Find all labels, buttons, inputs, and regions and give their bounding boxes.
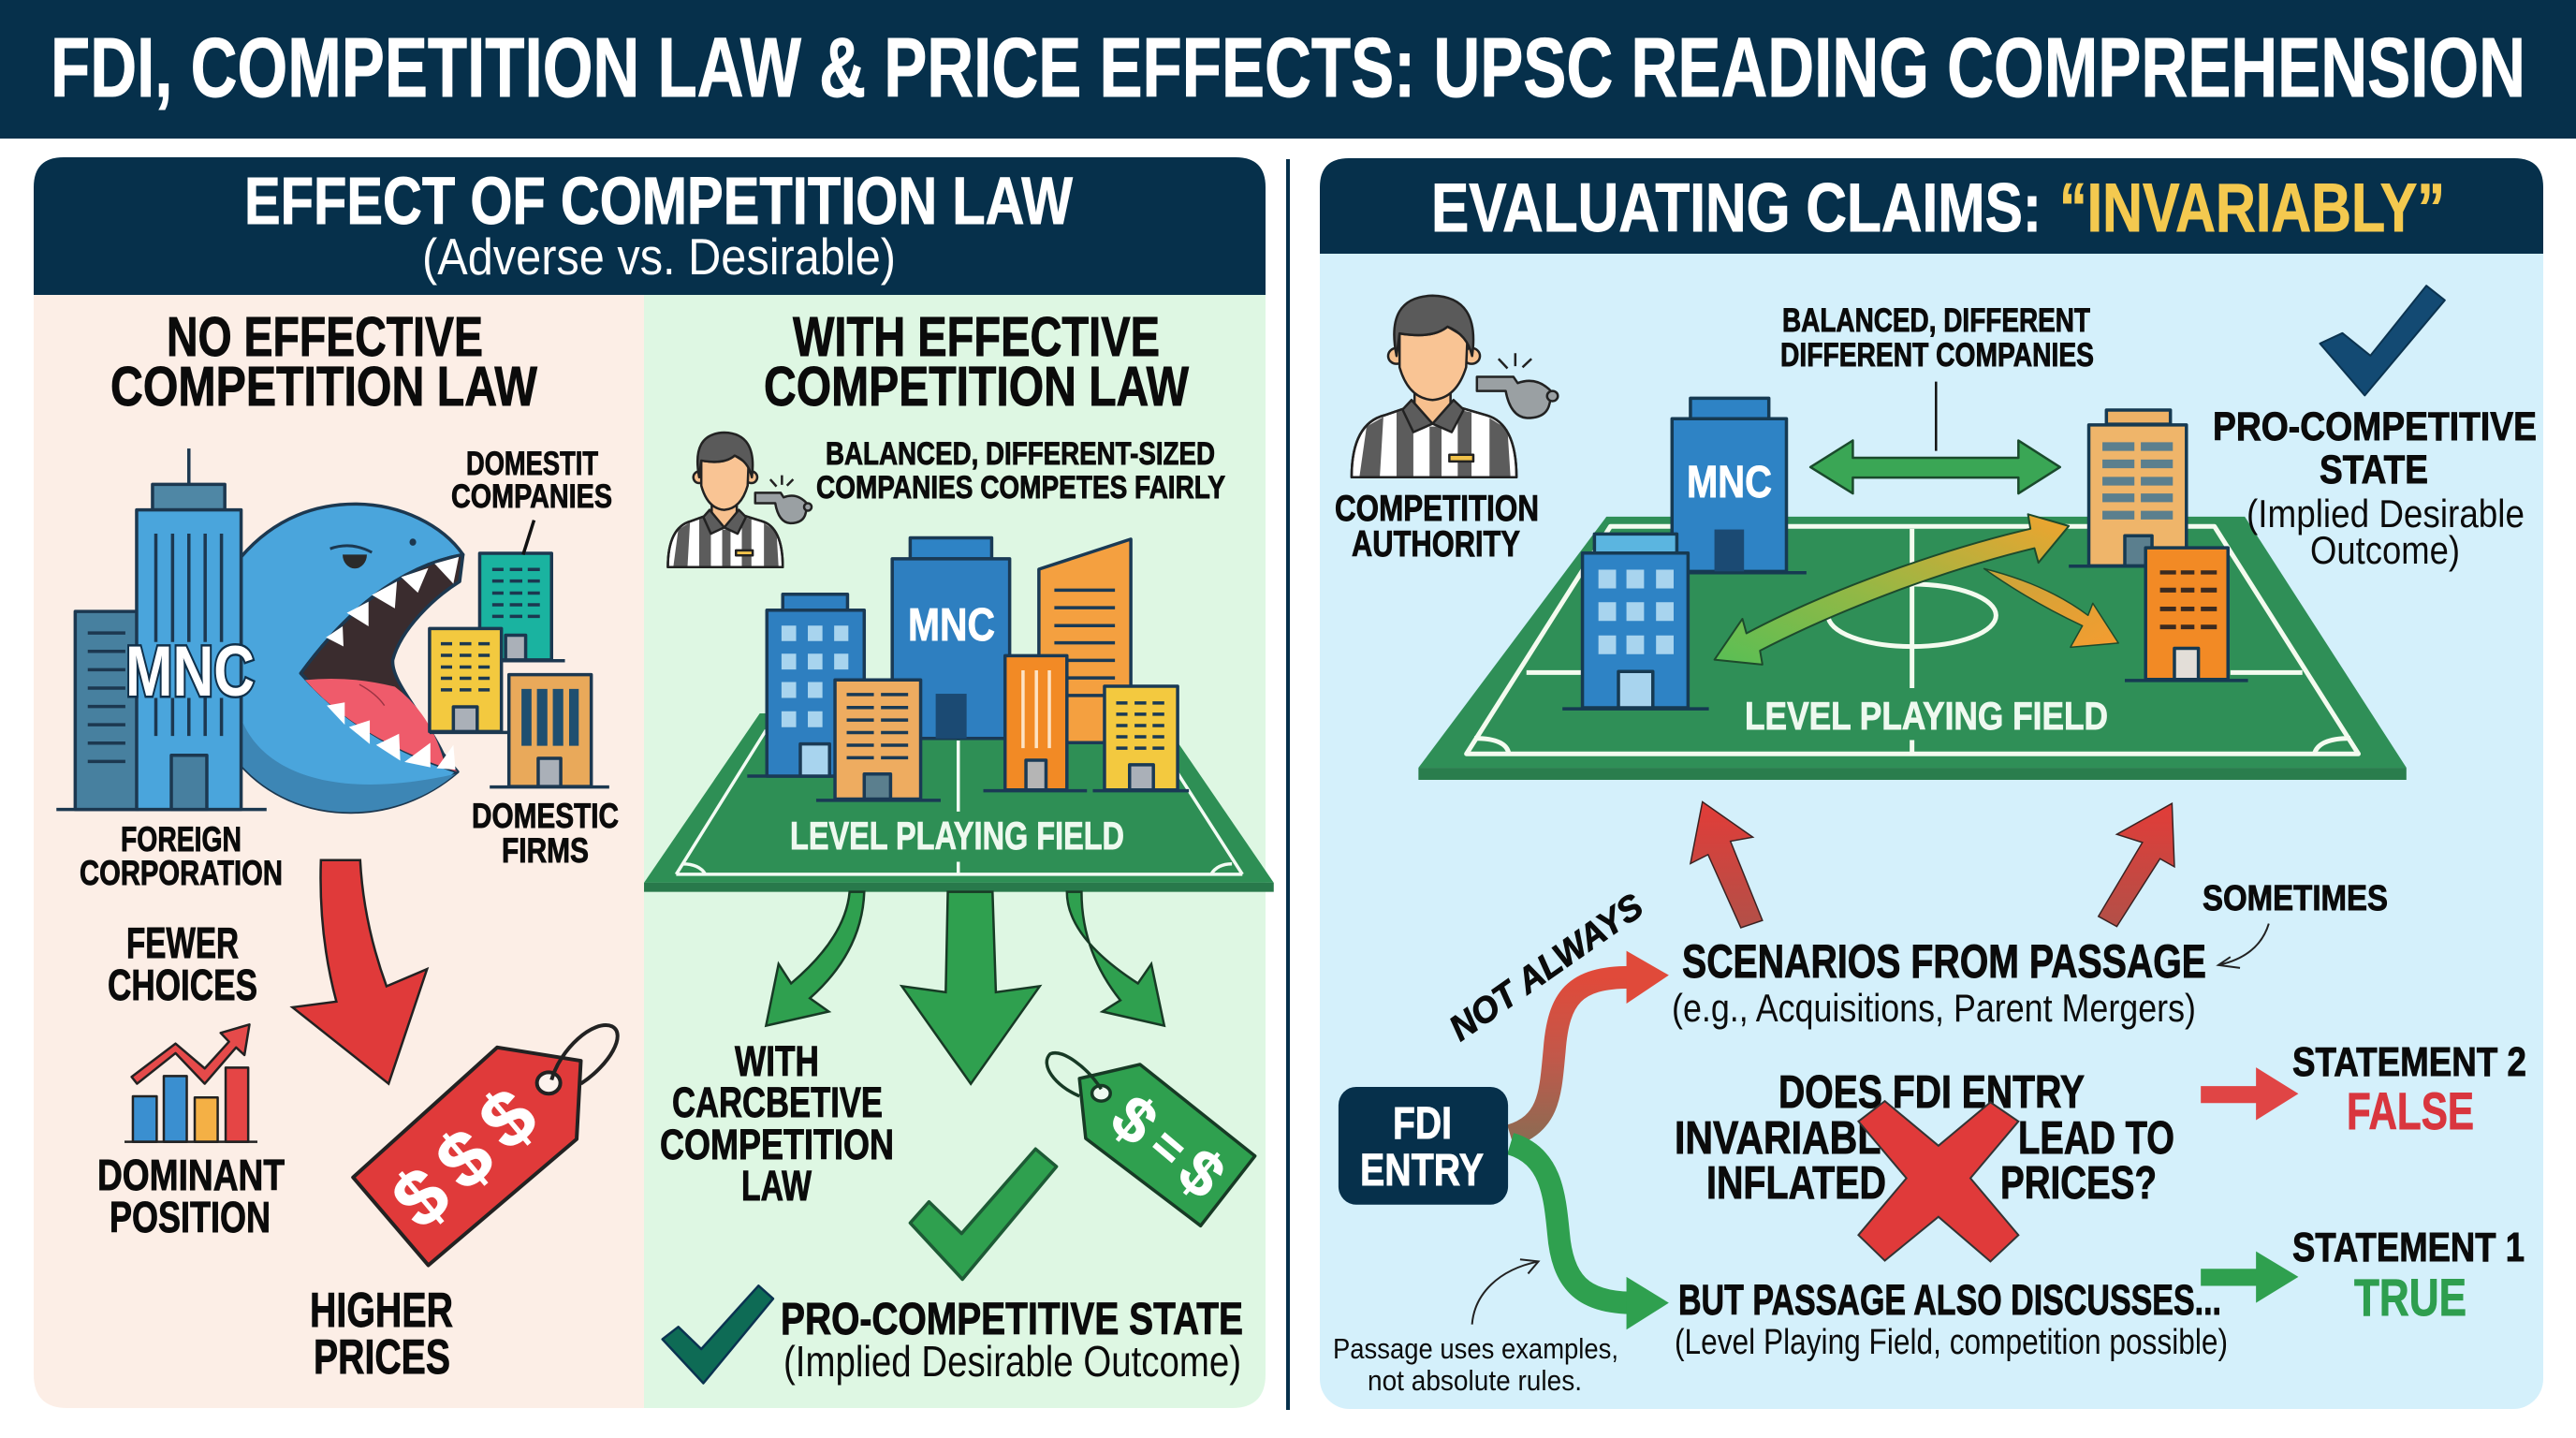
- verdict: statement 1 true: TRUE: [2354, 1268, 2466, 1327]
- illustration: level playing field with buildings: [644, 538, 1274, 892]
- text: pro-competitive state: STATE: [2320, 448, 2428, 492]
- text: pro-competitive state: (Implied Desirable Outcome): [783, 1337, 1241, 1386]
- icon: teal domestic building: [479, 553, 565, 661]
- label: domestic firms: [472, 797, 619, 870]
- icon: monster: [242, 504, 463, 812]
- label: dominant position: DOMINANT: [97, 1151, 285, 1199]
- box: FDI entry: [1339, 1087, 1508, 1205]
- label: with carcbetive competition law: [660, 1037, 894, 1210]
- panel header: effect of competition law: EFFECT OF COMPETITION LAW: [244, 165, 1073, 239]
- label: foreign corporation: [80, 820, 283, 892]
- arrow: red up arrow left: [1690, 801, 1763, 928]
- arrow: red up arrow right: [2099, 803, 2174, 927]
- label: balanced different companies: BALANCED, DIFFERENT: [1782, 302, 2090, 339]
- icon: tan building: [816, 680, 941, 800]
- arrow: examples pointer: [1472, 1259, 1539, 1325]
- label: level playing field: LEVEL PLAYING FIELD: [790, 814, 1124, 858]
- label: domestit companies: [451, 446, 612, 515]
- text: passage uses examples note: Passage uses examples,: [1333, 1332, 1618, 1365]
- icon: MNC tower: [56, 448, 267, 810]
- icon: blue building: [747, 594, 864, 776]
- icon: dark green check: [663, 1285, 773, 1384]
- icon: pitch: [1418, 517, 2407, 780]
- label: competition authority: [1335, 489, 1539, 565]
- text: pro-competitive state: PRO-COMPETITIVE: [2213, 404, 2537, 449]
- text: does FDI entry invariably lead to inflated prices: PRICES?: [2000, 1158, 2157, 1209]
- arrow: gradient diagonal double arrow: [1715, 514, 2069, 665]
- vertical divider: [1286, 159, 1290, 1410]
- panel header: effect of competition law: [34, 157, 1266, 295]
- text: does FDI entry invariably lead to inflated prices: [1675, 1067, 2174, 1209]
- arrow: sometimes pointer: [2218, 924, 2269, 968]
- text: but passage also discusses: [1675, 1276, 2228, 1362]
- label: fewer choices: [108, 918, 257, 1009]
- panel header: evaluating claims invariably: [1320, 158, 2543, 254]
- label: with carcbetive competition law: CARCBETIVE: [672, 1078, 883, 1126]
- verdict: statement 2 false: STATEMENT 2: [2292, 1039, 2526, 1085]
- label: balanced different companies: DIFFERENT COMPANIES: [1780, 337, 2094, 374]
- heading: no effective competition law: NO EFFECTIVE: [167, 306, 483, 368]
- icon: yellow building: [1092, 686, 1189, 791]
- heading: with effective competition law: [764, 306, 1189, 418]
- icon: red price tag: $: [419, 1111, 509, 1207]
- text: balanced companies compete fairly: COMPANIES COMPETES FAIRLY: [816, 470, 1225, 506]
- panel header: evaluating claims invariably: “INVARIABLY”: [2059, 170, 2445, 246]
- text: pro-competitive state: PRO-COMPETITIVE STATE: [781, 1295, 1243, 1344]
- label: dominant position: [97, 1151, 285, 1241]
- flow: FDI entry paths: [1339, 801, 2298, 1329]
- label: FDI entry: [1360, 1099, 1484, 1196]
- text: passage uses examples note: not absolute rules.: [1368, 1364, 1582, 1397]
- arrows: three green arrows down: [766, 892, 1164, 1084]
- label: MNC: MNC: [908, 600, 995, 651]
- label: higher prices: PRICES: [314, 1330, 450, 1385]
- text: balanced companies compete fairly: [816, 436, 1225, 506]
- icon: front blue building: [1562, 534, 1709, 709]
- label: FDI entry: FDI: [1393, 1099, 1452, 1149]
- text: does FDI entry invariably lead to inflated prices: INFLATED: [1706, 1158, 1886, 1209]
- verdict: statement 2 false: FALSE: [2347, 1081, 2474, 1140]
- icon: orange building: [2125, 548, 2248, 681]
- icon: tan building: [2069, 410, 2190, 566]
- text: does FDI entry invariably lead to inflated prices: DOES FDI ENTRY: [1778, 1067, 2085, 1118]
- panel: effect of competition law: [34, 157, 1274, 1408]
- icon: red price tag: $: [375, 1150, 465, 1245]
- arrow: green branch to passage: [1511, 1144, 1669, 1329]
- icon: tall orange building: [1039, 539, 1131, 742]
- arrow: green to true: [2201, 1252, 2298, 1303]
- icon: yellow domestic building: [430, 628, 507, 732]
- heading: with effective competition law: COMPETITION LAW: [764, 356, 1189, 418]
- heading: no effective competition law: [110, 306, 537, 418]
- text: scenarios from passage: (e.g., Acquisitions, Parent Mergers): [1672, 986, 2196, 1030]
- text: scenarios from passage: [1672, 935, 2206, 1030]
- icon: tan domestic building: [490, 675, 609, 787]
- icon: green price tag: [1046, 1053, 1255, 1225]
- heading: with effective competition law: WITH EFFECTIVE: [793, 306, 1160, 368]
- label: with carcbetive competition law: LAW: [741, 1162, 812, 1210]
- illustration: MNC monster eating domestic firms: [56, 448, 609, 812]
- label: fewer choices: FEWER: [126, 918, 239, 967]
- icon: MNC building: [1671, 398, 1807, 573]
- label: competition authority: AUTHORITY: [1352, 524, 1520, 565]
- chart icon: dominant position bars: [124, 1024, 257, 1142]
- label: competition authority: COMPETITION: [1335, 489, 1539, 529]
- verdict: statement 2 false: [2292, 1039, 2526, 1140]
- label: dominant position: POSITION: [110, 1193, 271, 1241]
- icon: red X: [1858, 1101, 2018, 1261]
- text: pro-competitive state: Outcome): [2310, 528, 2460, 572]
- text: balanced companies compete fairly: BALANCED, DIFFERENT-SIZED: [826, 436, 1215, 472]
- label: foreign corporation: FOREIGN: [121, 820, 242, 858]
- illustration: level playing field with companies: [1418, 286, 2445, 780]
- title banner: [0, 0, 2576, 139]
- icon: green price tag: $: [1098, 1081, 1171, 1159]
- label: domestic firms: FIRMS: [502, 831, 589, 870]
- icon: green field: [644, 713, 1274, 892]
- text: does FDI entry invariably lead to inflated prices: INVARIABLY: [1675, 1113, 1903, 1164]
- text: pro-competitive state: [781, 1295, 1243, 1386]
- arrow: small orange arrow: [1984, 568, 2118, 647]
- label: balanced different companies: [1780, 302, 2094, 374]
- panel: evaluating claims: [1320, 158, 2543, 1409]
- text: scenarios from passage: SCENARIOS FROM PASSAGE: [1682, 935, 2206, 988]
- text: but passage also discusses: (Level Playing Field, competition possible): [1675, 1323, 2228, 1362]
- text: does FDI entry invariably lead to inflated prices: LEAD TO: [2018, 1113, 2174, 1164]
- label: higher prices: [310, 1284, 453, 1385]
- label: with carcbetive competition law: COMPETITION: [660, 1121, 894, 1168]
- text: pro-competitive state: [2213, 404, 2537, 572]
- text: pro-competitive state: (Implied Desirable: [2247, 492, 2525, 536]
- label: domestit companies: DOMESTIT: [466, 446, 598, 482]
- icon: red price tag: [353, 1025, 618, 1265]
- icon: green check: [910, 1149, 1057, 1280]
- label: domestit companies: COMPANIES: [451, 478, 612, 515]
- arrow: red to false: [2201, 1067, 2298, 1121]
- text: but passage also discusses: BUT PASSAGE ALSO DISCUSSES...: [1678, 1276, 2221, 1324]
- icon: orange building: [984, 655, 1087, 791]
- verdict: statement 1 true: [2292, 1225, 2525, 1327]
- label: domestic firms: DOMESTIC: [472, 797, 619, 835]
- label: MNC: MNC: [1687, 458, 1772, 507]
- arrow: green double arrow: [1810, 440, 2060, 493]
- label: MNC on tower: MNC: [125, 632, 255, 712]
- icon: MNC building: [892, 538, 1010, 739]
- label: not always: NOT ALWAYS: [1442, 887, 1650, 1049]
- icon: referee competition authority: [1352, 296, 1558, 477]
- label: foreign corporation: CORPORATION: [80, 854, 283, 892]
- panel header: evaluating claims invariably: EVALUATING CLAIMS:: [1431, 170, 2042, 246]
- label: higher prices: HIGHER: [310, 1284, 453, 1338]
- verdict: statement 1 true: STATEMENT 1: [2292, 1225, 2525, 1270]
- label: with carcbetive competition law: WITH: [735, 1037, 819, 1085]
- arrow: red curved down arrow: [292, 860, 427, 1084]
- arrow: red branch to scenarios: [1511, 951, 1669, 1136]
- text: passage uses examples note: [1333, 1332, 1618, 1397]
- icon: navy check: [2320, 286, 2445, 395]
- icon: referee: [667, 433, 812, 567]
- icon: red price tag: $: [462, 1071, 552, 1167]
- label: fewer choices: CHOICES: [108, 961, 257, 1009]
- panel header: effect of competition law: (Adverse vs. Desirable): [422, 227, 896, 286]
- label: sometimes: SOMETIMES: [2203, 879, 2388, 918]
- icon: green price tag: =: [1140, 1118, 1196, 1178]
- icon: green price tag: $: [1165, 1135, 1238, 1212]
- label: level playing field: LEVEL PLAYING FIELD: [1745, 694, 2108, 738]
- label: FDI entry: ENTRY: [1360, 1146, 1484, 1196]
- heading: no effective competition law: COMPETITION LAW: [110, 356, 537, 418]
